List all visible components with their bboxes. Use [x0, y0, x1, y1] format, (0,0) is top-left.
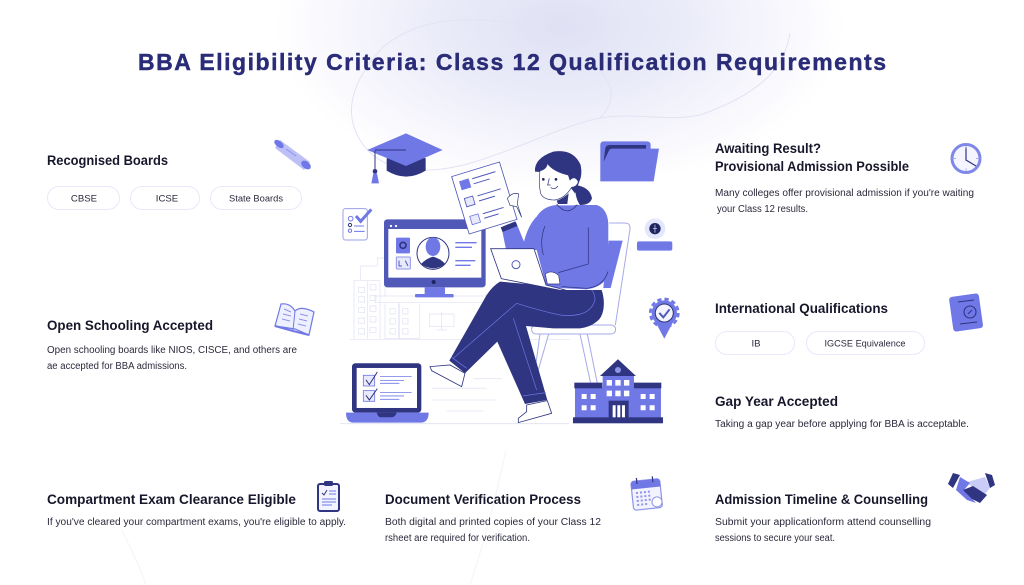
heading: compartment exam: Compartment Exam Clearance Eligible	[47, 492, 296, 507]
text: awaiting result description: Many colleges offer provisional admission if you're waiting	[715, 188, 974, 199]
icon: open book	[275, 304, 314, 335]
pill: IGCSE Equivalence	[806, 332, 924, 354]
icon: rolled certificate	[273, 138, 312, 171]
text: compartment description: If you've cleared your compartment exams, you're eligible to apply.	[47, 517, 346, 528]
heading: admission timeline: Admission Timeline & Counselling	[715, 492, 928, 507]
panel: recognised boards	[47, 138, 312, 210]
woman figure	[430, 151, 608, 423]
text: document verification description: Both digital and printed copies of your Class 12	[385, 517, 601, 528]
heading: awaiting result: Awaiting Result?	[715, 141, 821, 156]
icon: desktop monitor with profile	[384, 219, 486, 297]
text: document verification description	[385, 517, 601, 544]
sweater	[502, 205, 608, 289]
pill: IB: IB	[751, 338, 761, 350]
laptop	[491, 249, 565, 290]
illustration: student with laptop	[340, 133, 678, 424]
trousers	[449, 282, 604, 404]
text: admission timeline description	[715, 517, 931, 544]
title: BBA Eligibility Criteria: Class 12 Qualification Requirements	[138, 49, 886, 75]
icon: folder	[600, 141, 659, 181]
icon: college building	[573, 359, 663, 423]
heading: awaiting result	[715, 141, 909, 174]
panel: compartment exam	[47, 481, 346, 528]
heading: international qualifications: International Qualifications	[715, 301, 888, 316]
icon: badge with check	[650, 299, 678, 339]
text: admission timeline description: sessions to secure your seat.	[715, 533, 835, 544]
panel: gap year	[715, 394, 969, 430]
icon: clock	[952, 144, 980, 172]
ground line	[340, 422, 569, 425]
pill: IGCSE Equivalence: IGCSE Equivalence	[824, 338, 906, 350]
icon: graduation cap	[367, 133, 443, 183]
document held by woman	[452, 162, 522, 234]
pill: IB	[716, 332, 794, 354]
icon: passport	[949, 293, 983, 332]
text: admission timeline description: Submit your applicationform attend counselling	[715, 517, 931, 528]
pill: ICSE	[130, 186, 200, 210]
face	[539, 163, 578, 200]
shoes	[430, 365, 465, 387]
neck and collar	[557, 185, 574, 205]
icon: calendar	[630, 476, 663, 510]
text: awaiting result description	[715, 188, 974, 215]
pill: State Boards	[210, 186, 302, 210]
text: open schooling description: Open schooling boards like NIOS, CISCE, and others are	[47, 345, 298, 356]
panel: admission timeline	[715, 473, 995, 544]
panel: awaiting result	[715, 141, 980, 215]
pill: CBSE	[48, 186, 120, 210]
pill: CBSE: CBSE	[71, 194, 97, 204]
text: open schooling description	[47, 345, 298, 372]
panel: international qualifications	[715, 293, 983, 354]
text: awaiting result description: your Class 12 results.	[717, 204, 808, 215]
heading: recognised boards: Recognised Boards	[47, 153, 168, 168]
background city outline	[350, 258, 570, 339]
icon: checklist note	[343, 209, 371, 240]
text: open schooling description: ae accepted for BBA admissions.	[47, 361, 187, 372]
icon: clipboard	[318, 481, 339, 511]
text: gap year description: Taking a gap year before applying for BBA is acceptable.	[715, 419, 969, 430]
chair	[532, 223, 630, 383]
cuff	[501, 221, 517, 232]
icon: webcam	[637, 218, 672, 251]
hair and bun	[535, 151, 581, 193]
text: document verification description: rsheet are required for verification.	[385, 533, 530, 544]
pill: State Boards: State Boards	[229, 194, 283, 204]
pill: ICSE: ICSE	[156, 194, 178, 204]
heading: open schooling: Open Schooling Accepted	[47, 318, 213, 333]
icon: laptop with checklist	[346, 363, 429, 423]
panel: document verification	[385, 476, 663, 544]
icon: handshake	[948, 473, 995, 503]
heading: gap year: Gap Year Accepted	[715, 394, 838, 409]
panel: open schooling	[47, 304, 314, 372]
heading: awaiting result: Provisional Admission Possible	[715, 159, 909, 174]
heading: document verification: Document Verification Process	[385, 492, 581, 507]
